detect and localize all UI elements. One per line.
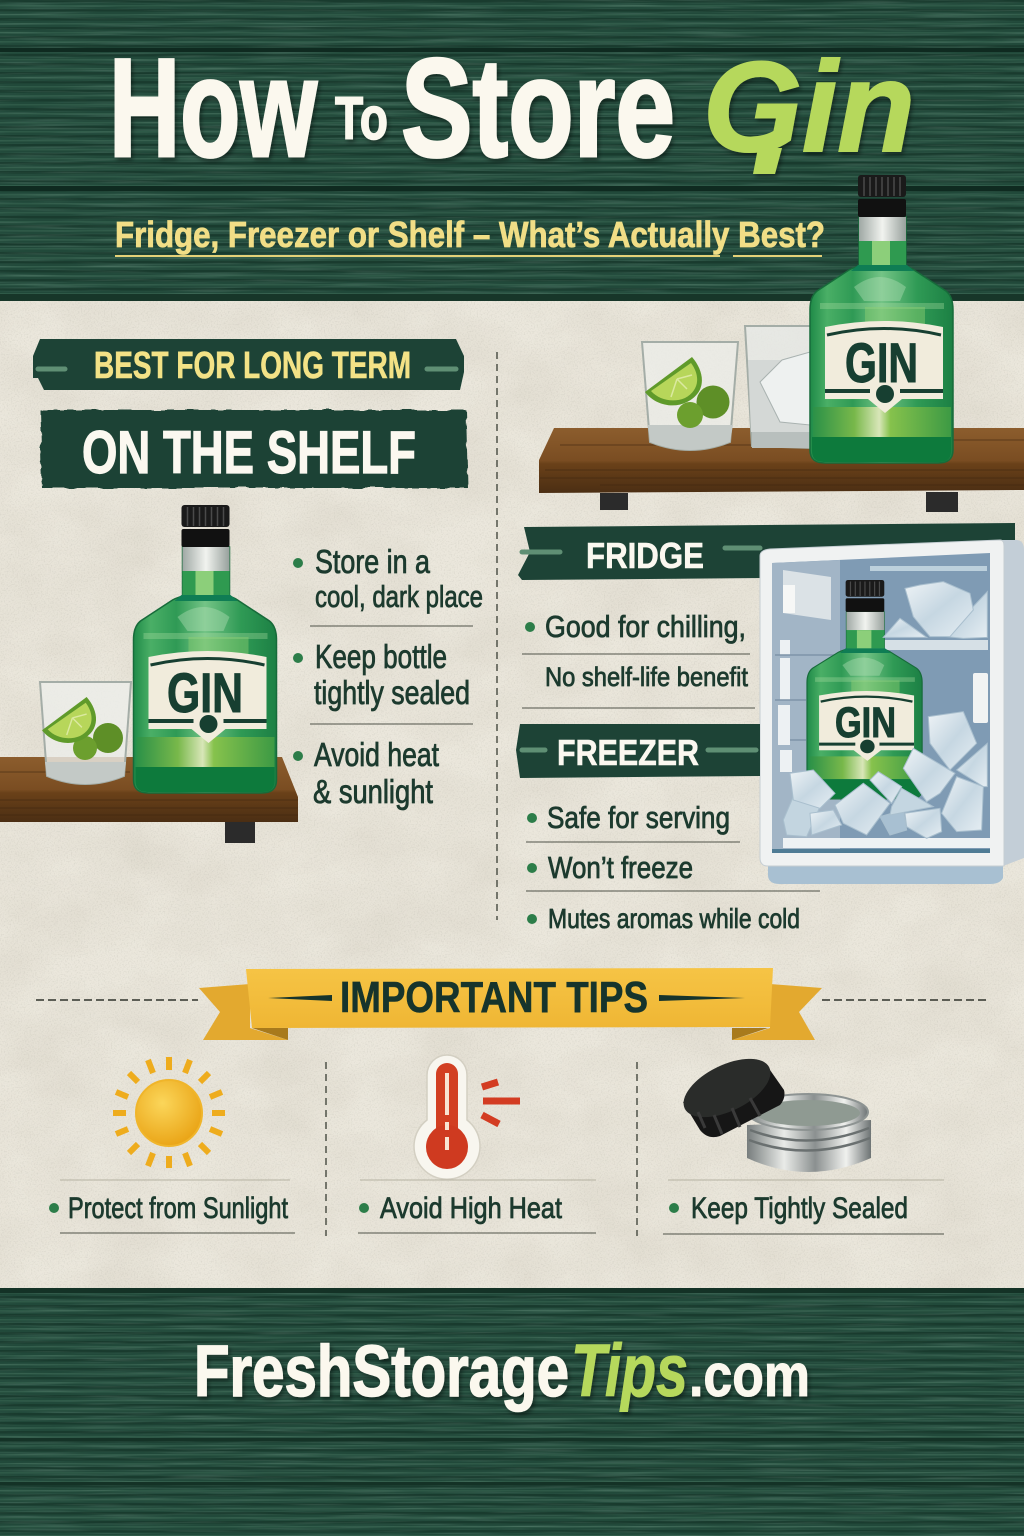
wooden shelf (539, 428, 1024, 512)
footer website: .com (689, 1342, 810, 1409)
bullet list: Store in a (315, 543, 431, 580)
freezer bullets: Won’t freeze (548, 850, 693, 885)
bottle (810, 175, 953, 463)
tip: heat (358, 1055, 596, 1233)
banner: on the shelf (40, 410, 468, 488)
footer website: Tips (571, 1329, 688, 1412)
bullet list: Avoid heat (314, 736, 439, 773)
icon: cap and bottle neck (675, 1047, 871, 1172)
banner: best for long term: BEST FOR LONG TERM (94, 345, 411, 387)
banner: fridge: FRIDGE (586, 535, 704, 576)
fridge illustration (760, 540, 1024, 884)
freezer bullets: Mutes aromas while cold (548, 903, 800, 934)
bullet list: tightly sealed (314, 674, 470, 711)
title: Store (401, 29, 675, 186)
fridge bullets: No shelf-life benefit (545, 662, 748, 692)
tip: heat: Avoid High Heat (380, 1192, 563, 1225)
bottle (134, 505, 276, 793)
bullet list: Keep bottle (315, 638, 447, 675)
panel: fridge and freezer (516, 523, 1024, 934)
wooden shelf (0, 757, 298, 843)
tip: sealed: Keep Tightly Sealed (691, 1192, 908, 1225)
dividers in tips row (326, 1062, 637, 1236)
fridge illustration: GIN (835, 699, 896, 747)
banner: freezer (516, 724, 760, 778)
freezer bullets (526, 800, 820, 934)
title (109, 29, 915, 186)
glass with lime (40, 682, 131, 784)
footer band (0, 1288, 1024, 1536)
freezer bullets: Safe for serving (547, 800, 730, 835)
bullet list: & sunlight (313, 773, 433, 810)
tip: sunlight (49, 1057, 295, 1233)
bullet list (293, 543, 483, 810)
footer website: FreshStorage (194, 1332, 569, 1412)
fridge bullets: Good for chilling, (545, 609, 746, 644)
fridge bullets (522, 609, 755, 708)
icon: sun (113, 1057, 225, 1168)
bullet list: cool, dark place (315, 579, 483, 614)
title: Gin (703, 36, 915, 179)
bottle: GIN (167, 661, 243, 724)
bottle: GIN (845, 331, 918, 394)
banner: best for long term (33, 339, 464, 390)
glass with lime (642, 342, 738, 450)
subtitle: Fridge, Freezer or Shelf – What’s Actually Best? (115, 214, 825, 255)
banner: freezer: FREEZER (557, 732, 699, 773)
header band (0, 0, 1024, 301)
ice cubes (783, 582, 987, 838)
icon: thermometer (414, 1055, 520, 1179)
banner: important tips (36, 968, 986, 1040)
banner: fridge (518, 523, 1015, 580)
tip: sunlight: Protect from Sunlight (68, 1192, 289, 1225)
title: To (335, 85, 388, 152)
glass with ice (745, 326, 812, 448)
banner: important tips: IMPORTANT TIPS (340, 973, 648, 1022)
tip: sealed (663, 1047, 944, 1234)
title: How (109, 29, 318, 186)
shelf with glasses and gin bottle (539, 175, 1024, 512)
panel: on the shelf (0, 339, 483, 843)
banner: on the shelf: ON THE SHELF (82, 419, 416, 486)
divider (496, 352, 498, 920)
